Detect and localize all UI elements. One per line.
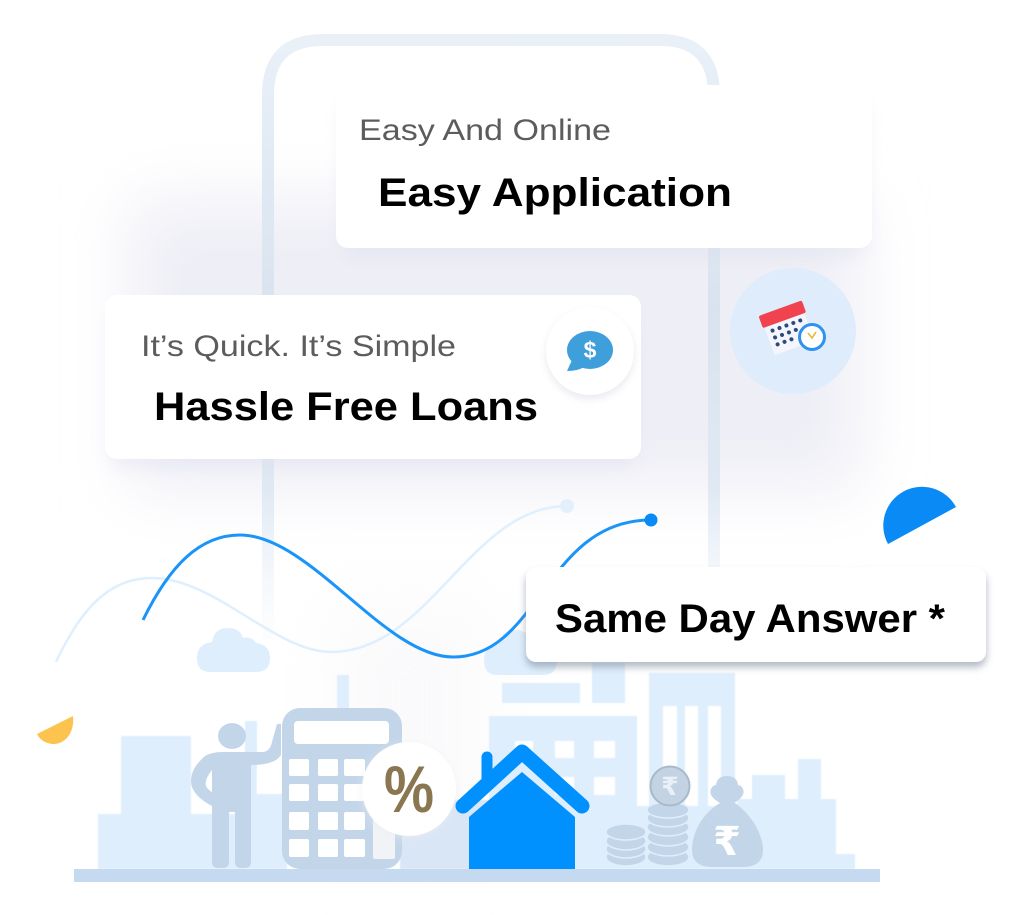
icon: person xyxy=(191,723,281,868)
light trend line xyxy=(56,506,567,662)
icon: coin stacks xyxy=(606,802,689,866)
icon: calculator xyxy=(282,708,402,869)
card shadows xyxy=(110,100,868,468)
icon: rupee coin: ₹ xyxy=(661,772,679,801)
icon: blue half circle xyxy=(883,487,956,544)
blue trend end dot xyxy=(644,514,658,526)
cityscape buildings xyxy=(98,663,855,869)
icon: money bag: ₹ xyxy=(713,819,741,865)
panel: same day answer card xyxy=(526,567,986,667)
blue trend line xyxy=(143,520,651,657)
light trend end dot xyxy=(560,499,574,513)
ground line xyxy=(74,869,880,882)
card heading: Hassle Free Loans xyxy=(154,385,538,429)
icon: percent badge: % xyxy=(384,752,434,826)
background haze xyxy=(130,200,860,850)
card heading: Easy Application xyxy=(378,171,732,215)
cloud left xyxy=(197,628,270,672)
icon: money bag xyxy=(692,776,763,867)
card subtitle: Easy And Online xyxy=(359,114,611,147)
card subtitle: It’s Quick. It’s Simple xyxy=(141,330,456,363)
icon: calendar and clock xyxy=(730,268,856,394)
panel: easy application card xyxy=(336,85,872,248)
icon: dollar speech bubble: $ xyxy=(584,337,597,363)
card heading: Same Day Answer * xyxy=(555,597,945,641)
icon: percent badge xyxy=(362,742,456,838)
icon: dollar speech bubble xyxy=(546,307,634,399)
icon: rupee coin xyxy=(650,766,690,806)
icon: house xyxy=(463,752,582,869)
panel: hassle free loans card xyxy=(105,295,641,459)
cloud right xyxy=(484,630,557,675)
building windows xyxy=(257,706,721,806)
phone outline xyxy=(268,40,714,640)
icon: yellow half circle xyxy=(37,716,73,744)
